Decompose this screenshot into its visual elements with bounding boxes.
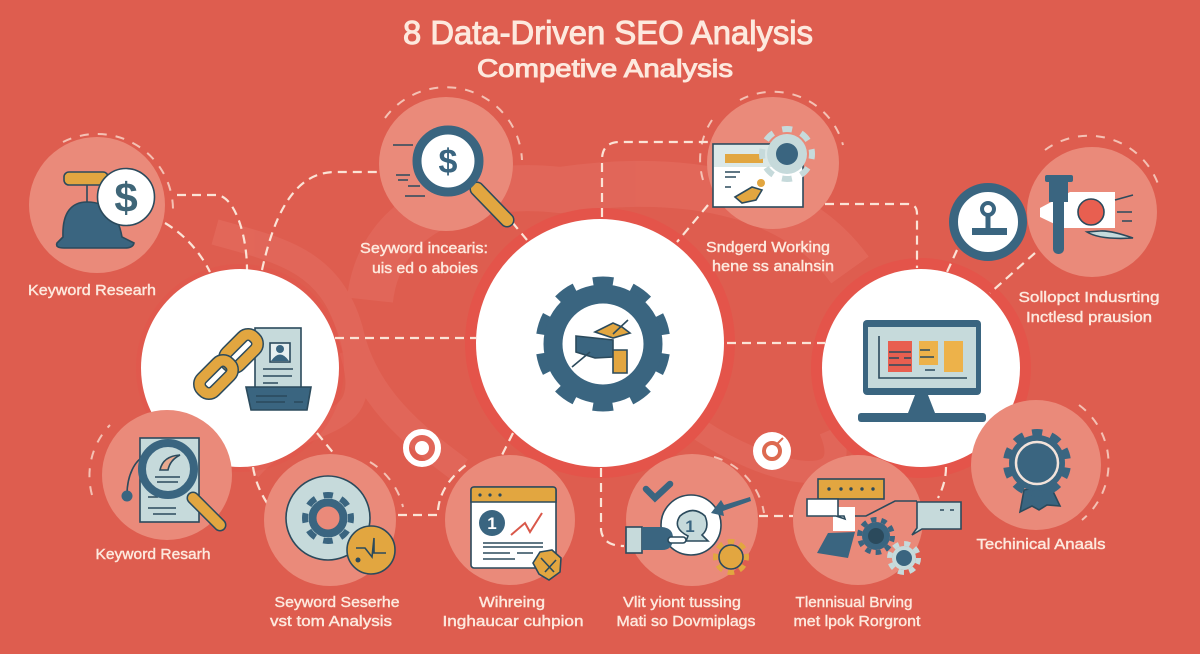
label: Wihreing [479,595,545,611]
dashed orbit arcs [63,87,1160,520]
icon: browser chart: 1 [487,514,497,533]
subtitle: Competive Analysis [477,55,733,83]
icon: hand, target and gear: 1 [685,517,695,536]
label [706,240,834,275]
icon: stamp ring [954,188,1022,256]
label: uis ed o aboies [372,261,478,277]
label [442,595,584,630]
hub disc [141,269,339,467]
panel: keyword research top left [28,137,165,299]
label: vst tom Analysis [270,614,392,630]
label: Seyword Seserhe [274,595,400,611]
label: Sndgerd Working [706,240,830,256]
dashed connectors [165,142,1035,546]
icon: speech boxes and gears [807,479,961,572]
label [270,595,400,630]
panel: visit tussing [616,454,758,630]
icon: hand, target and gear [626,484,751,572]
disc [379,97,513,231]
label: Seyword incearis: [360,241,488,257]
label: Keyword Researh [28,283,156,299]
label [794,595,920,630]
disc [445,455,575,585]
icon: browser chart [471,487,561,580]
panel: technical briefing [793,455,961,630]
hub disc [476,219,724,467]
icon: magnifier with dollar [393,130,507,220]
panel: keyword incearis top [360,97,513,277]
disc [626,454,758,586]
label [360,241,488,277]
disc [29,137,165,273]
icon: document and magnifier [122,438,220,525]
icon: magnifier with dollar: $ [439,143,458,181]
icon: target right [753,432,791,470]
icon: monitor with bars [858,320,986,422]
panel: technical analysis [971,400,1106,553]
label: Tlennisual Brving [796,595,912,611]
icon: gear in disc [286,476,395,574]
label [1018,290,1160,326]
icon: target left [406,432,438,464]
panel: left hub [141,269,339,467]
disc [102,410,232,540]
label: Inghaucar cuhpion [442,614,584,630]
panel: right hub [822,269,1020,467]
label: Inctlesd prausion [1026,310,1152,326]
label: Mati so Dovmiplags [616,614,756,630]
disc [793,455,923,585]
label: Vlit yiont tussing [623,595,741,611]
icon: pin and tag [1040,175,1133,254]
label: Keyword Resarh [96,547,210,563]
label: met lpok Rorgront [794,614,920,630]
title: 8 Data-Driven SEO Analysis [403,14,813,51]
panel: keyword search analysis [264,454,400,630]
label: hene ss analnsin [712,259,834,275]
hub disc [822,269,1020,467]
icon: hat with dollar: $ [114,174,138,221]
icon: central gear [541,282,665,406]
icon: gear badge [1007,433,1067,512]
icon: hat with dollar [57,168,154,248]
icon: document with chain [196,328,311,410]
disc [707,97,839,229]
label: Sollopct Indusrting [1018,290,1160,306]
panel: software indusrting right [954,147,1160,326]
panel: window chart [442,455,584,630]
panel: standard working top [706,97,839,275]
panel: central hub [476,219,724,467]
disc [971,400,1101,530]
icon: window with gear [713,129,812,207]
disc [264,454,396,586]
disc [1027,147,1157,277]
halos behind main circles [136,208,1031,478]
panel: keyword research bottom left [96,410,232,563]
label [616,595,756,630]
label: Techinical Anaals [976,537,1106,553]
